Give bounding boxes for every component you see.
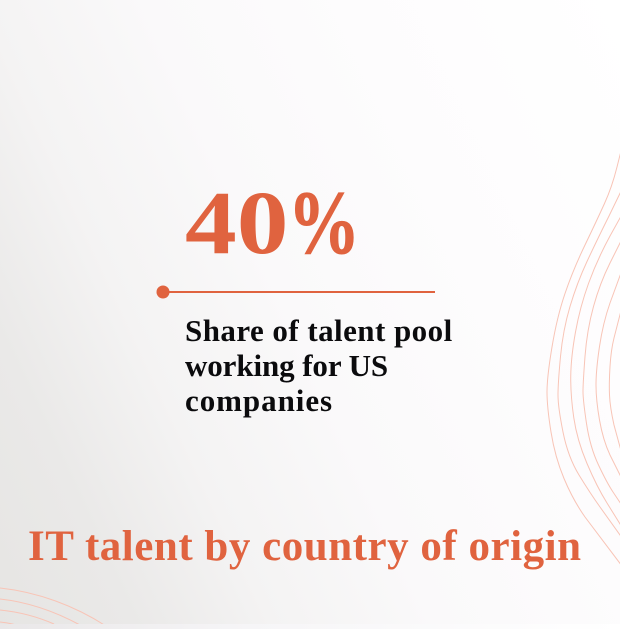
description text: [185, 313, 453, 418]
description text: companies: [185, 383, 333, 418]
big number: 40%: [185, 174, 360, 273]
divider line with dot: [156, 286, 435, 298]
heading: IT talent by country of origin: [28, 523, 582, 570]
description text: Share of talent pool: [185, 313, 453, 348]
big number: 40%: 40: [185, 174, 288, 273]
bottom edge strip: [0, 624, 620, 629]
description text: working for US: [185, 348, 388, 383]
big number: 40%: %: [288, 174, 360, 273]
